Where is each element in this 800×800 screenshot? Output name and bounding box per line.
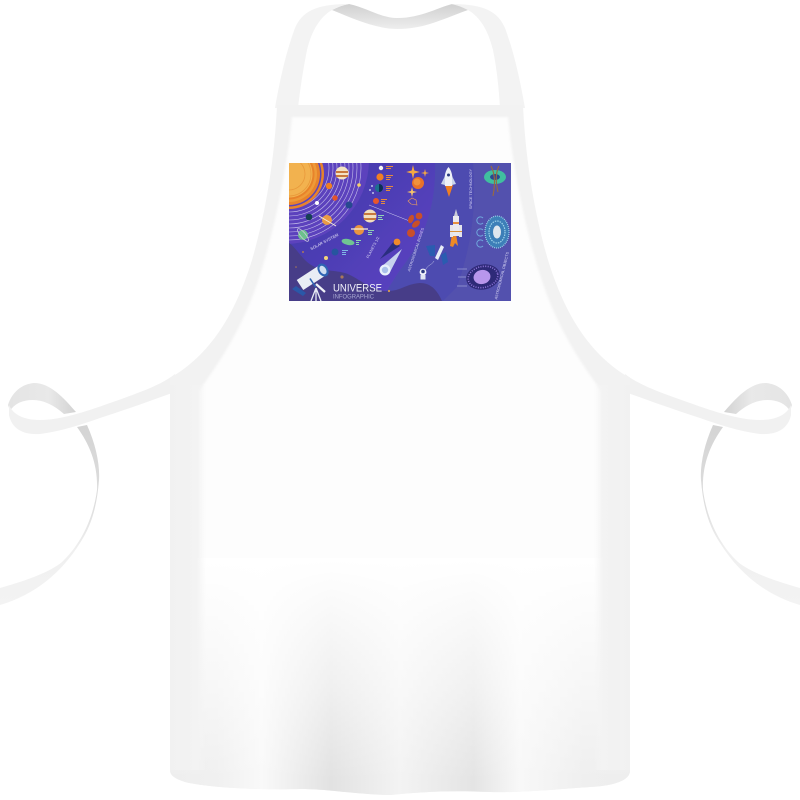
band: planets bbox=[289, 163, 435, 301]
comet: orange bbox=[380, 239, 400, 259]
satellite bbox=[426, 245, 448, 265]
galaxy arcs bbox=[477, 217, 483, 247]
purple galaxy captions bbox=[457, 269, 467, 286]
large rocket bbox=[450, 209, 462, 247]
small rocket bbox=[441, 167, 456, 197]
band: solar system orbits bbox=[289, 163, 369, 244]
astronomical body icons bbox=[406, 165, 429, 205]
right neck strap bbox=[451, 4, 525, 108]
title: UNIVERSE bbox=[333, 282, 382, 294]
heading: astronomical bodies: ASTRONOMICAL BODIES bbox=[407, 227, 425, 272]
heading: solar system: SOLAR SYSTEM bbox=[309, 232, 339, 251]
heading: astronomical objects: ASTRONOMICAL OBJECTS bbox=[494, 251, 510, 300]
right waist tie bbox=[625, 374, 800, 605]
planets column bbox=[341, 166, 384, 246]
asteroids bbox=[407, 213, 422, 237]
background stars bbox=[295, 251, 390, 292]
printed universe infographic bbox=[289, 163, 511, 301]
heading: planets: PLANETS 1/2 bbox=[366, 236, 380, 259]
solar system planets bbox=[296, 166, 361, 260]
planet captions bbox=[381, 166, 393, 204]
icon: spiral galaxy bbox=[485, 216, 509, 248]
comet: white bbox=[380, 249, 402, 276]
left waist tie bbox=[0, 374, 175, 605]
back neck strap bbox=[332, 4, 468, 29]
icon: wormhole disc bbox=[484, 166, 506, 196]
icon: purple galaxy bbox=[466, 264, 500, 290]
heading: space technology: SPACE TECHNOLOGY bbox=[469, 168, 473, 209]
divider line bbox=[369, 205, 412, 222]
left neck strap bbox=[275, 4, 349, 108]
astronaut bbox=[420, 261, 434, 280]
band: astronomical bodies bbox=[289, 163, 474, 301]
planet captions: teal bbox=[342, 215, 384, 255]
subtitle: INFOGRAPHIC bbox=[333, 294, 375, 300]
icon: sun bbox=[289, 163, 324, 209]
background panel bbox=[443, 163, 511, 301]
dark hill bbox=[289, 243, 442, 301]
apron body bbox=[170, 105, 630, 796]
telescope bbox=[292, 264, 329, 301]
